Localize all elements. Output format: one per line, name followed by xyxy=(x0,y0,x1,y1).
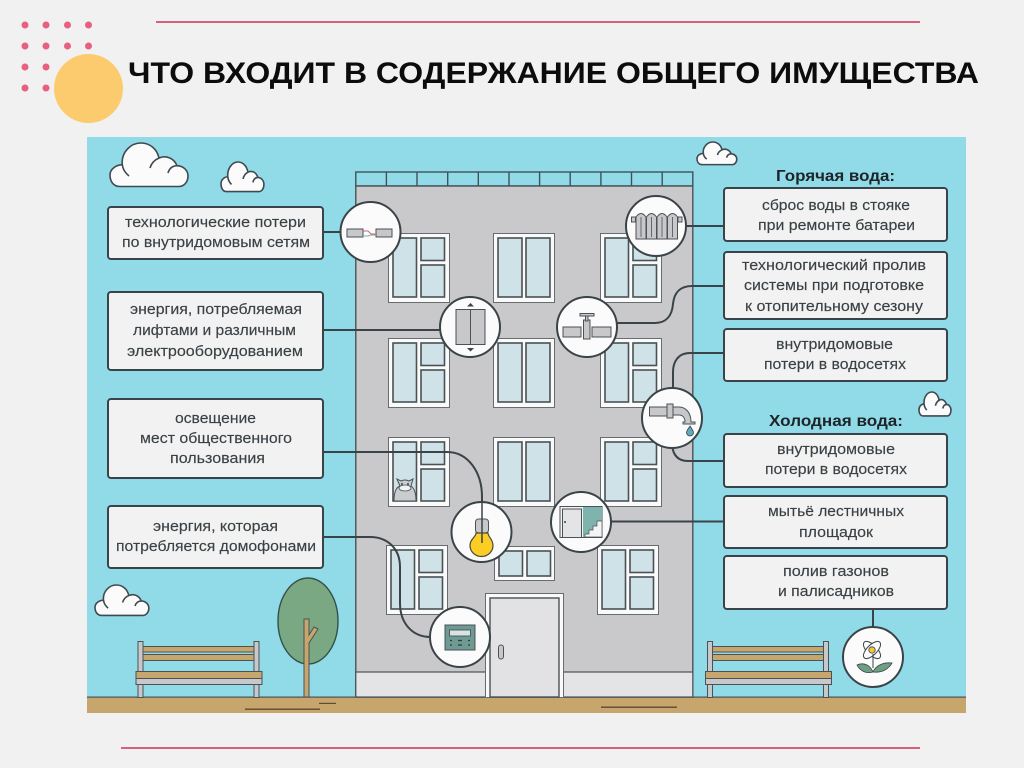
window row 4 left xyxy=(386,546,448,614)
callout: cold water losses: внутридомовые xyxy=(777,441,895,458)
callout: lighting: мест общественного xyxy=(140,430,292,447)
title: ЧТО ВХОДИТ В СОДЕРЖАНИЕ ОБЩЕГО ИМУЩЕСТВА xyxy=(128,57,979,90)
window row 4 right xyxy=(598,546,658,614)
plinth xyxy=(356,672,693,697)
top accent line xyxy=(156,21,920,23)
callout: elevators: энергия, потребляемая xyxy=(130,301,302,318)
icon: stairwell xyxy=(551,492,611,552)
callout: elevators: лифтами и различным xyxy=(133,322,296,339)
window row 2 middle xyxy=(494,338,554,408)
window row 1 right xyxy=(600,234,662,302)
callout: riser discharge xyxy=(724,188,947,241)
icon: flower xyxy=(843,627,903,687)
decorative dots xyxy=(22,22,92,92)
callout: intercoms: потребляется домофонами xyxy=(116,538,316,555)
callout: network losses: по внутридомовым сетям xyxy=(122,234,310,251)
tree xyxy=(278,578,338,697)
callout: lighting xyxy=(108,399,323,478)
sky panel xyxy=(87,137,966,698)
callout: intercoms: энергия, которая xyxy=(153,518,278,535)
heading: cold water: Холодная вода: xyxy=(769,413,903,430)
callout: hot water losses: потери в водосетях xyxy=(764,356,907,373)
callout: heating season spill xyxy=(724,252,947,319)
callout: stair washing: мытьё лестничных xyxy=(768,503,905,520)
icon: light bulb xyxy=(452,497,512,562)
ground xyxy=(87,696,966,713)
icon: intercom xyxy=(430,607,490,667)
callout: heating season spill: технологический пролив xyxy=(742,257,926,274)
window row 3 right xyxy=(600,438,662,506)
callout: network losses: технологические потери xyxy=(125,214,306,231)
callout: network losses xyxy=(108,207,323,259)
icon: cable joint xyxy=(340,202,400,262)
callout: lighting: освещение xyxy=(175,410,256,427)
facade xyxy=(356,186,693,697)
entrance door xyxy=(486,594,564,698)
right bench xyxy=(706,642,832,698)
window row 4 small middle xyxy=(494,546,554,580)
callout: cold water losses xyxy=(724,434,947,487)
building xyxy=(356,172,693,698)
callout: lawn watering: полив газонов xyxy=(783,563,889,580)
callout: heating season spill: системы при подготовке xyxy=(744,277,924,294)
window row 2 right xyxy=(600,338,662,408)
cat in window xyxy=(394,479,416,501)
heading: hot water: Горячая вода: xyxy=(776,168,895,185)
callout: hot water losses: внутридомовые xyxy=(776,336,893,353)
cloud bottom left xyxy=(95,585,149,615)
callout: riser discharge: сброс воды в стояке xyxy=(762,197,910,214)
callout: intercoms xyxy=(108,506,323,568)
callout: elevators xyxy=(108,292,323,370)
icon: radiator xyxy=(626,196,686,256)
window row 1 middle xyxy=(494,234,554,302)
icon: valve xyxy=(557,297,617,357)
callout: heating season spill: к отопительному сезону xyxy=(745,298,924,315)
callout: hot water losses xyxy=(724,329,947,381)
cloud right xyxy=(919,392,951,416)
callout: lawn watering xyxy=(724,556,947,609)
icon: elevator xyxy=(440,297,500,357)
roof parapet xyxy=(356,172,693,186)
window row 3 left xyxy=(388,438,450,506)
cloud top right xyxy=(697,142,737,165)
bottom accent line xyxy=(121,747,920,749)
callout: stair washing xyxy=(724,496,947,548)
cloud large top left xyxy=(110,143,188,186)
connectors xyxy=(323,226,873,637)
window row 3 middle xyxy=(494,438,554,506)
window row 2 left xyxy=(388,338,450,408)
cloud small top left xyxy=(221,162,264,192)
window row 1 left xyxy=(388,234,450,302)
decorative yellow circle xyxy=(54,54,123,123)
callout: riser discharge: при ремонте батареи xyxy=(758,217,915,234)
left bench xyxy=(136,642,262,698)
icon: leaking tap xyxy=(642,388,702,448)
callout: lighting: пользования xyxy=(170,450,265,467)
callout: stair washing: площадок xyxy=(799,524,873,541)
callout: elevators: электрооборудованием xyxy=(127,343,303,360)
callout: cold water losses: потери в водосетях xyxy=(765,461,908,478)
callout: lawn watering: и палисадников xyxy=(778,583,894,600)
